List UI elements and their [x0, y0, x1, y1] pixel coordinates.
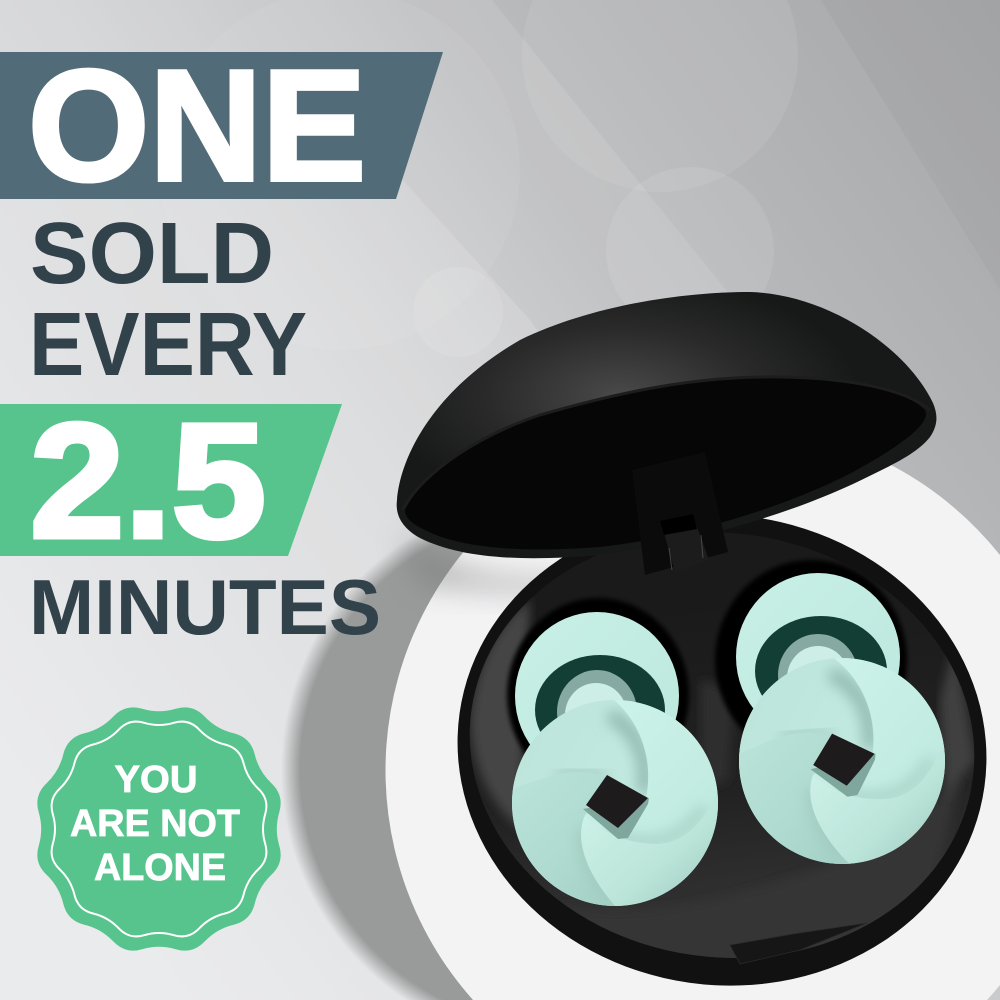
product: open earplug case: [397, 292, 1000, 1000]
text: EVERY: EVERY: [29, 295, 307, 395]
case base: [458, 518, 986, 986]
lid shadow: [400, 530, 640, 595]
case latch: [730, 923, 867, 964]
back earplug right: [736, 573, 900, 741]
case lid: [397, 292, 936, 575]
banner: 2.5: [0, 389, 342, 572]
badge scalloped shape: [37, 707, 281, 951]
front earplug right: [720, 643, 965, 884]
badge text: ARE NOT: [70, 803, 240, 845]
white backdrop circle: [385, 425, 1000, 1000]
text: SOLD: SOLD: [30, 205, 274, 302]
badge text: ALONE: [94, 847, 226, 889]
badge text: YOU: [114, 759, 198, 801]
badge text: [70, 759, 240, 889]
number 2.5: 2.5: [30, 389, 266, 572]
front earplug left: [500, 693, 730, 918]
text: MINUTES: MINUTES: [29, 563, 381, 651]
back earplug left: [515, 612, 679, 780]
badge: you are not alone: [37, 707, 281, 951]
shadow of backdrop circle: [281, 495, 701, 1000]
lid hinge: [632, 452, 728, 575]
sockets: [504, 597, 690, 755]
banner: ONE: [0, 38, 443, 214]
heading word ONE: ONE: [28, 38, 366, 214]
